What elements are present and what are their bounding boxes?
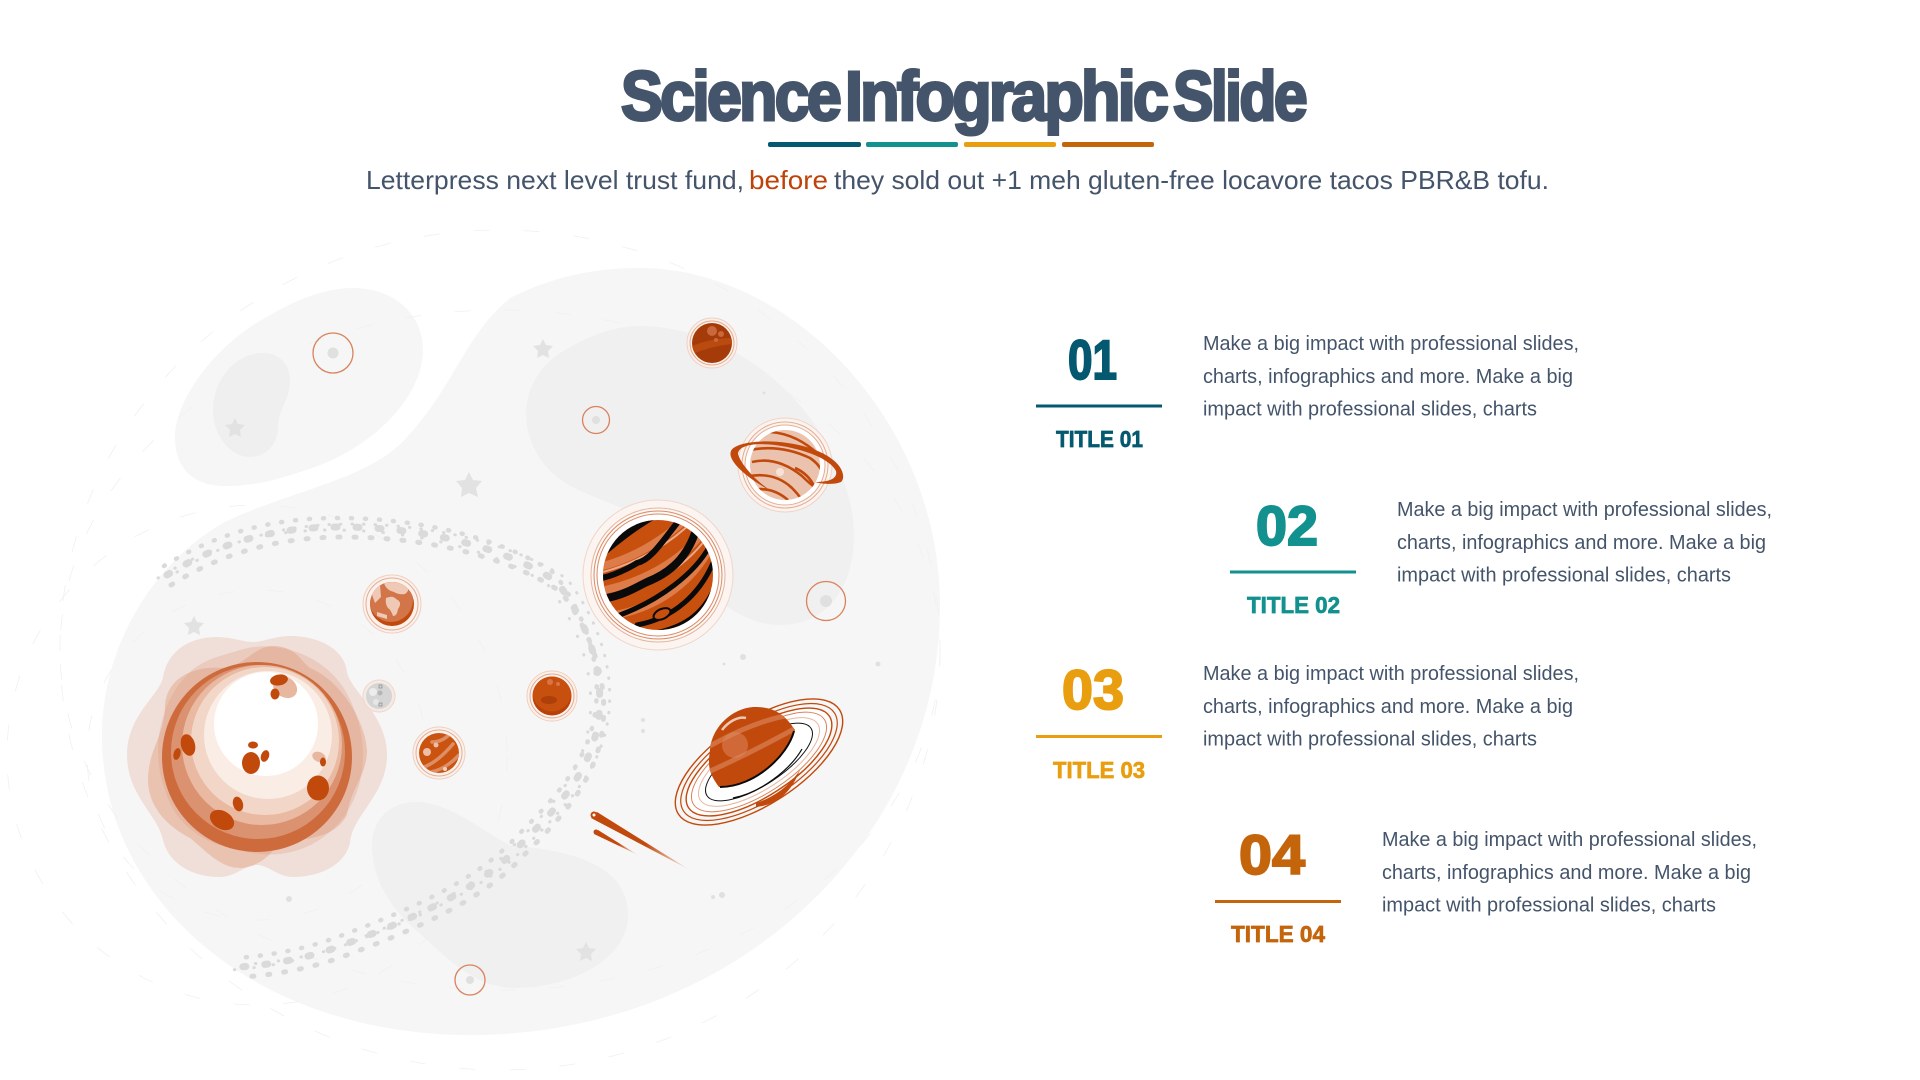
text 03 — [1203, 663, 1579, 750]
inner blob: upper right — [526, 326, 854, 625]
subtitle: Letterpress next level trust fund, — [366, 165, 744, 195]
text 01: impact with professional slides, charts — [1203, 398, 1537, 420]
item 04 — [1215, 823, 1757, 947]
label 02: TITLE 02 — [1247, 592, 1340, 618]
planet: moon — [363, 680, 395, 712]
item 01 — [1036, 328, 1579, 452]
background blob: main — [102, 268, 940, 1035]
text 04: Make a big impact with professional slides, — [1382, 829, 1757, 851]
subtitle: before — [749, 165, 828, 195]
title: Slide — [1173, 57, 1306, 135]
number 03: 03 — [1062, 658, 1124, 721]
text 04: impact with professional slides, charts — [1382, 894, 1716, 916]
text 01: charts, infographics and more. Make a big — [1203, 366, 1573, 388]
rule 04 — [1215, 900, 1341, 903]
text 04 — [1382, 829, 1757, 916]
ringed markers — [313, 333, 846, 995]
label 01: TITLE 01 — [1056, 426, 1143, 452]
title: Infographic — [845, 57, 1167, 135]
number 02: 02 — [1256, 494, 1318, 557]
sun: outer flare — [127, 636, 387, 877]
text 01: Make a big impact with professional slides, — [1203, 333, 1579, 355]
title — [621, 57, 1306, 135]
inner blob: bottom — [372, 802, 628, 988]
planet: small striped — [413, 727, 465, 779]
sun: layered disc — [162, 662, 352, 852]
rule 03 — [1036, 735, 1162, 738]
title underline bars — [768, 142, 1154, 147]
illustration: space scene — [7, 230, 940, 1070]
number 01: 01 — [1068, 328, 1117, 391]
text 01 — [1203, 333, 1579, 420]
text 02: impact with professional slides, charts — [1397, 564, 1731, 586]
title: Science — [621, 57, 840, 135]
subtitle: they sold out +1 meh gluten-free locavore tacos PBR&B tofu. — [834, 165, 1549, 195]
small scattered dots — [286, 392, 880, 902]
planet: top dark — [687, 318, 737, 368]
text 02 — [1397, 499, 1772, 586]
item 03 — [1036, 658, 1579, 783]
item 02 — [1230, 494, 1772, 618]
sun: inner flare — [158, 646, 363, 855]
planet: saturn — [674, 698, 844, 826]
number 04: 04 — [1239, 823, 1305, 886]
text 02: charts, infographics and more. Make a big — [1397, 532, 1766, 554]
text 03: charts, infographics and more. Make a big — [1203, 696, 1573, 718]
inner blob: upper left — [213, 353, 290, 457]
background blob: upper left — [175, 288, 423, 486]
label 04: TITLE 04 — [1231, 921, 1325, 947]
planet: ringed striped — [730, 418, 843, 512]
planet: large banded — [583, 500, 733, 650]
rule 02 — [1230, 570, 1356, 574]
comet — [590, 812, 690, 870]
stars — [184, 339, 596, 961]
saturn: body — [709, 707, 795, 787]
label 03: TITLE 03 — [1053, 757, 1145, 783]
text 03: Make a big impact with professional slides, — [1203, 663, 1579, 685]
planet: earth-like — [363, 575, 421, 633]
text 03: impact with professional slides, charts — [1203, 728, 1537, 750]
text 02: Make a big impact with professional slides, — [1397, 499, 1772, 521]
sun — [127, 636, 387, 877]
sun: spots — [172, 671, 329, 834]
rule 01 — [1036, 404, 1162, 408]
sun: middle flare — [148, 646, 367, 868]
text 04: charts, infographics and more. Make a big — [1382, 862, 1751, 884]
planet: dark red — [527, 671, 577, 721]
asteroid belt — [158, 518, 610, 977]
subtitle — [366, 165, 1549, 195]
